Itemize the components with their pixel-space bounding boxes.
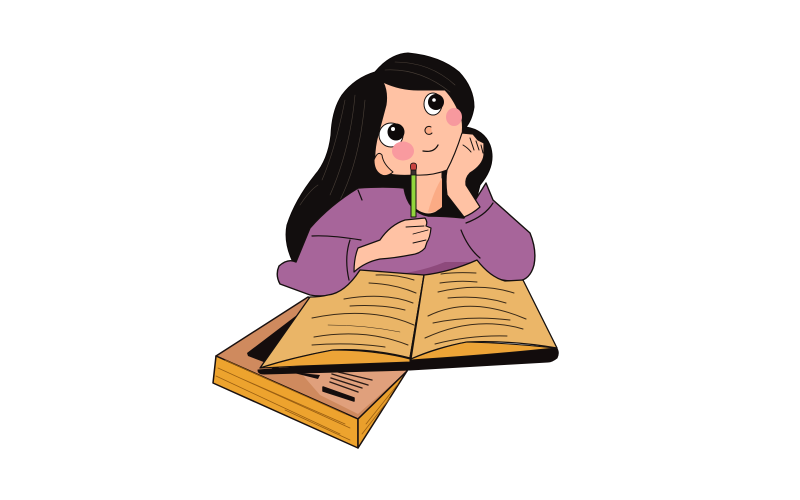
face [374,82,462,176]
sweater body and sleeves [277,183,535,296]
right cheek blush [446,108,462,126]
left page [260,270,424,368]
closed book lying under the open book [213,297,420,448]
smile [423,145,438,151]
right eye [424,93,444,115]
right page text lines [425,273,526,344]
neck [412,170,442,214]
book cover shadow [258,347,558,374]
hand holding pencil and forearm [354,218,431,272]
long black hair [286,53,492,268]
right page edge [411,342,555,360]
open book [258,260,558,374]
left cheek blush [392,142,414,160]
hand resting on cheek [446,133,484,217]
pencil [410,163,417,217]
left page edge [260,350,410,368]
book spine line [410,275,424,358]
nose [425,126,432,134]
right page [411,260,557,359]
ear [374,153,393,176]
left eye [379,123,404,147]
left page text lines [312,275,416,347]
